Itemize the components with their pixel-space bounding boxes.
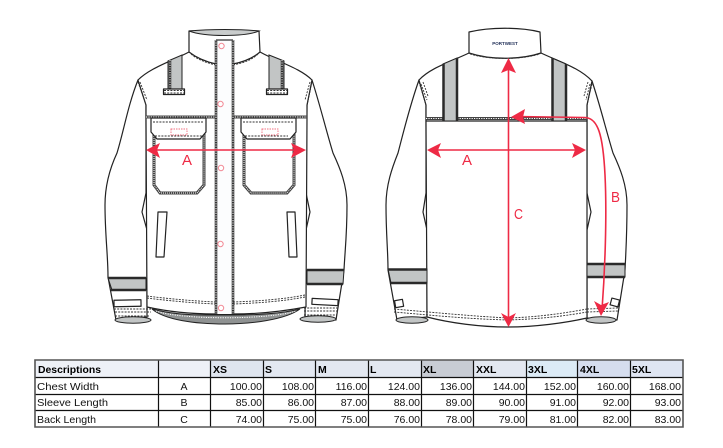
row: sleeve length: 92.00 <box>603 397 629 409</box>
sleeve arrow B <box>511 109 609 316</box>
table header: XXL <box>476 364 497 376</box>
row: sleeve length: 88.00 <box>394 397 420 409</box>
back label B: B <box>611 190 620 206</box>
table grid <box>35 360 683 427</box>
row: chest width: 152.00 <box>544 381 576 393</box>
row: chest width: 136.00 <box>440 381 472 393</box>
row: back length: 79.00 <box>499 414 525 426</box>
back cuffs <box>395 298 620 323</box>
back length arrow C <box>501 58 516 327</box>
row: back length: 82.00 <box>603 414 629 426</box>
back jacket <box>386 28 627 327</box>
row: chest width: 108.00 <box>282 381 314 393</box>
table header: S <box>265 364 272 376</box>
back chest arrow A <box>427 143 586 158</box>
front chest arrow A <box>146 143 306 158</box>
row: back length: 81.00 <box>550 414 576 426</box>
table header: XL <box>423 364 437 376</box>
front cuffs <box>114 298 338 323</box>
row: sleeve length: 91.00 <box>550 397 576 409</box>
row: sleeve length: 90.00 <box>499 397 525 409</box>
placket snap buttons <box>218 43 224 311</box>
front yoke seam <box>146 116 307 118</box>
row: sleeve length: 85.00 <box>236 397 262 409</box>
table header: XS <box>213 364 227 376</box>
front body <box>138 52 312 314</box>
row: back length <box>37 414 681 426</box>
right chest pocket <box>241 118 296 193</box>
back collar logo: PORTWEST <box>492 41 518 46</box>
front sleeve reflective bands <box>108 270 344 290</box>
back sleeve reflective bands <box>388 264 625 283</box>
table header: M <box>318 364 327 376</box>
front left sleeve <box>105 80 147 320</box>
back hem stitching <box>394 308 618 320</box>
row: sleeve length: 86.00 <box>288 397 314 409</box>
back label C: C <box>514 207 523 223</box>
row: sleeve length: Sleeve Length <box>37 397 108 409</box>
side pockets <box>156 212 297 257</box>
front reflective shoulder stripes <box>164 55 288 94</box>
hem stitching <box>147 295 305 304</box>
row: chest width: Chest Width <box>37 381 99 393</box>
row: back length: 76.00 <box>394 414 420 426</box>
row: sleeve length: 93.00 <box>655 397 681 409</box>
table header: Descriptions <box>38 364 101 376</box>
table header: 4XL <box>580 364 600 376</box>
armhole stitching <box>138 82 312 105</box>
table header: 3XL <box>528 364 548 376</box>
row: sleeve length <box>37 397 681 409</box>
row: chest width: 124.00 <box>388 381 420 393</box>
row: back length: 75.00 <box>288 414 314 426</box>
front collar <box>189 30 260 65</box>
back armhole stitching <box>419 82 592 105</box>
row: back length: 78.00 <box>446 414 472 426</box>
table header <box>35 360 683 377</box>
back body <box>419 53 592 327</box>
row: back length: C <box>180 414 188 426</box>
front label A: A <box>182 153 192 169</box>
row: sleeve length: B <box>180 397 188 409</box>
front hem band <box>152 309 300 324</box>
row: sleeve length: 87.00 <box>341 397 367 409</box>
row: chest width: 100.00 <box>230 381 262 393</box>
front right sleeve <box>305 80 347 320</box>
row: sleeve length: 89.00 <box>446 397 472 409</box>
back right sleeve <box>587 81 627 320</box>
row: back length: Back Length <box>37 414 96 426</box>
row: chest width <box>37 381 681 393</box>
row: back length: 74.00 <box>236 414 262 426</box>
row: chest width: 116.00 <box>336 381 367 393</box>
back label A: A <box>462 153 472 169</box>
front jacket <box>105 30 347 324</box>
row: back length: 75.00 <box>341 414 367 426</box>
row: chest width: 168.00 <box>649 381 681 393</box>
back collar <box>469 28 541 58</box>
back reflective shoulder stripes <box>443 58 566 121</box>
back left sleeve <box>386 80 427 320</box>
table header: 5XL <box>632 364 652 376</box>
row: chest width: 144.00 <box>493 381 525 393</box>
row: chest width: A <box>180 381 188 393</box>
row: back length: 83.00 <box>655 414 681 426</box>
front placket <box>216 40 233 314</box>
size table <box>35 360 683 427</box>
left chest pocket <box>151 118 206 193</box>
table header: L <box>370 364 377 376</box>
back yoke seam <box>426 120 587 122</box>
row: chest width: 160.00 <box>597 381 629 393</box>
